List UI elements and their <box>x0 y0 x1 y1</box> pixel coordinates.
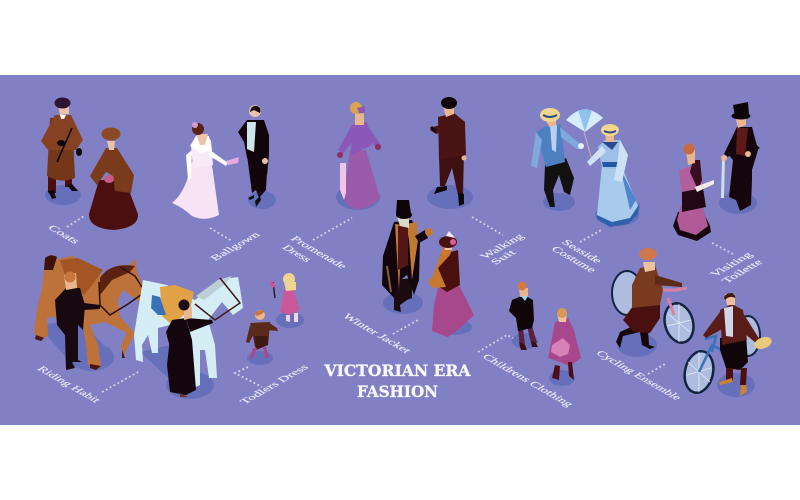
label: Cycling Ensemble: Cycling Ensemble <box>593 349 684 402</box>
label: Todlers Dress: Todlers Dress <box>238 363 312 406</box>
label: Visiting: Visiting <box>708 251 757 279</box>
figure group: walking suit <box>427 97 473 209</box>
label: Walking: Walking <box>479 232 528 261</box>
label: Toilette: Toilette <box>720 258 766 285</box>
title <box>324 361 471 401</box>
label: Ballgown: Ballgown <box>209 231 264 263</box>
figure group: promenade dress <box>336 102 381 210</box>
label: Suit: Suit <box>489 249 519 267</box>
label: Seaside: Seaside <box>558 238 605 265</box>
label: Childrens Clothing: Childrens Clothing <box>479 353 576 409</box>
label: Winter Jacket: Winter Jacket <box>339 312 413 355</box>
figure group: toddlers <box>246 273 304 365</box>
figure group: ballgown <box>172 105 276 219</box>
label: Coats: Coats <box>45 224 82 246</box>
label: Costume: Costume <box>548 245 599 274</box>
figure group: visiting toilette <box>673 102 760 241</box>
title: VICTORIAN ERA <box>324 361 471 380</box>
purple background band <box>0 75 800 425</box>
label: Dress: Dress <box>279 244 313 264</box>
label: Riding Habit: Riding Habit <box>34 365 102 405</box>
title: FASHION <box>357 382 438 401</box>
figure group: winter jacket <box>382 200 474 337</box>
figure group: seaside costume <box>531 108 640 227</box>
label: Promenade: Promenade <box>287 235 349 271</box>
connector dotted lines <box>67 216 735 392</box>
figure group: childrens clothing <box>509 282 581 386</box>
figure group: coats <box>41 98 138 230</box>
figure group: riding habit <box>34 255 243 399</box>
figure group: cycling ensemble <box>612 248 773 397</box>
